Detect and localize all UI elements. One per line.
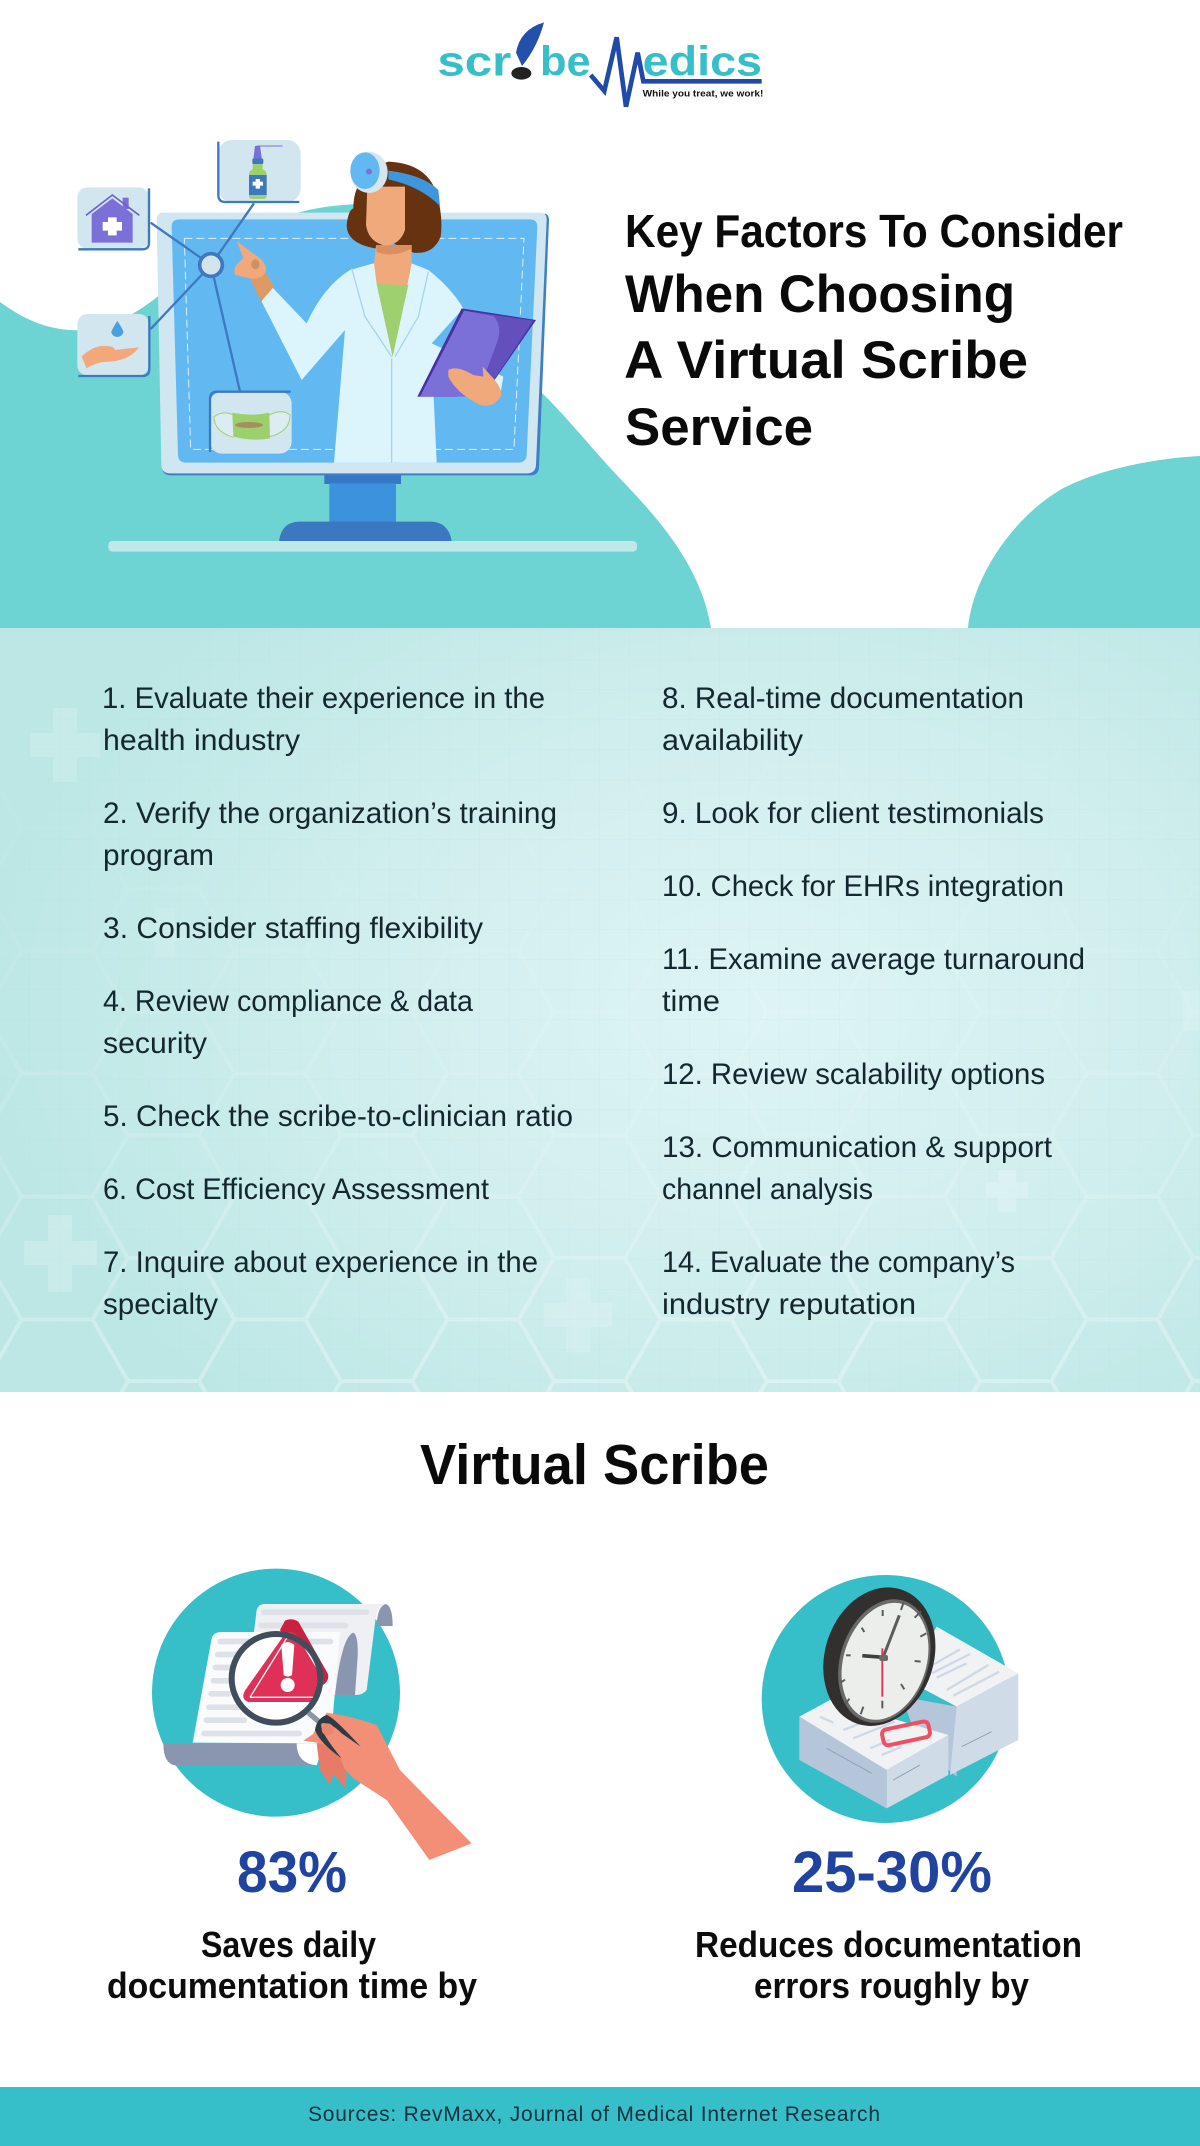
item 12: 12. Review scalability options bbox=[662, 1058, 1045, 1091]
item 3: 3. Consider staffing flexibility bbox=[103, 912, 483, 945]
logo wordmark: scr bbox=[437, 38, 511, 85]
icon: house with cross bbox=[77, 187, 149, 249]
caption: saves documentation time bbox=[107, 1924, 477, 2006]
item 6: 6. Cost Efficiency Assessment bbox=[103, 1173, 490, 1206]
stat: 25-30%: 25-30% bbox=[792, 1840, 992, 1905]
logo wordmark: edics bbox=[643, 38, 762, 85]
item 4 bbox=[103, 985, 473, 1060]
item 8 bbox=[662, 682, 1024, 757]
heading: Virtual Scribe: Virtual Scribe bbox=[420, 1433, 769, 1497]
doctor headband and head mirror bbox=[350, 152, 440, 206]
logo pulse line bbox=[591, 37, 762, 107]
item 11 bbox=[662, 943, 1085, 1018]
item 13 bbox=[662, 1131, 1053, 1206]
logo wordmark: be bbox=[540, 38, 591, 85]
doctor hair bbox=[347, 162, 441, 253]
title bbox=[624, 205, 1123, 457]
title: A Virtual Scribe bbox=[624, 331, 1028, 390]
item 11: 11. Examine average turnaround bbox=[662, 943, 1085, 976]
item 9: 9. Look for client testimonials bbox=[662, 797, 1044, 830]
doctor lab coat bbox=[262, 263, 503, 463]
item 7: 7. Inquire about experience in the bbox=[103, 1246, 538, 1279]
title: Service bbox=[625, 398, 813, 457]
item 8: 8. Real-time documentation bbox=[662, 682, 1024, 715]
item 7: specialty bbox=[103, 1288, 218, 1321]
figure: doctor bbox=[234, 152, 536, 463]
item 13: channel analysis bbox=[662, 1173, 873, 1206]
left list column bbox=[102, 682, 573, 1321]
caption: reduces documentation errors: Reduces documentation bbox=[695, 1924, 1082, 1965]
item 14: industry reputation bbox=[662, 1288, 916, 1321]
logo wordmark bbox=[437, 38, 762, 85]
caption: saves documentation time: documentation time by bbox=[107, 1965, 477, 2006]
stat: 83%: 83% bbox=[237, 1840, 347, 1905]
item 1 bbox=[102, 682, 545, 757]
title: When Choosing bbox=[625, 265, 1015, 324]
item 1: health industry bbox=[103, 724, 300, 757]
doctor hand on clipboard bbox=[448, 367, 501, 406]
icon: hand with water drop bbox=[77, 314, 149, 376]
item 11: time bbox=[662, 985, 720, 1018]
connector lines bbox=[151, 203, 254, 392]
item 14 bbox=[662, 1246, 1015, 1321]
item 7 bbox=[103, 1246, 538, 1321]
right list column bbox=[662, 682, 1085, 1321]
item 2 bbox=[103, 797, 557, 872]
monitor stand bbox=[279, 473, 452, 541]
logo tagline: While you treat, we work! bbox=[643, 88, 763, 98]
caption: reduces documentation errors: errors roughly by bbox=[754, 1965, 1029, 2006]
panel: key factors list bbox=[0, 628, 1200, 1392]
item 14: 14. Evaluate the company’s bbox=[662, 1246, 1015, 1279]
icon: document with warning under magnifier bbox=[152, 1569, 472, 1860]
item 8: availability bbox=[662, 724, 803, 757]
item 1: 1. Evaluate their experience in the bbox=[102, 682, 545, 715]
background blob: right teal hill bbox=[968, 456, 1200, 628]
illustration: doctor on monitor bbox=[77, 140, 637, 552]
icon: face mask bbox=[210, 392, 292, 454]
connector node bbox=[200, 254, 222, 276]
item 10: 10. Check for EHRs integration bbox=[662, 870, 1064, 903]
caption: saves documentation time: Saves daily bbox=[201, 1924, 376, 1965]
desk shelf bbox=[108, 541, 637, 552]
item 2: 2. Verify the organization’s training bbox=[103, 797, 557, 830]
monitor bbox=[157, 213, 549, 475]
clipboard bbox=[417, 308, 536, 397]
footer sources text: Sources: RevMaxx, Journal of Medical Internet Research bbox=[308, 2103, 880, 2126]
caption: reduces documentation errors bbox=[695, 1924, 1082, 2006]
background blob: left teal hill bbox=[0, 204, 711, 628]
doctor neck and shirt bbox=[352, 245, 428, 463]
icon: spray bottle bbox=[218, 140, 301, 202]
title: Key Factors To Consider bbox=[625, 205, 1123, 257]
item 5: 5. Check the scribe-to-clinician ratio bbox=[103, 1100, 573, 1133]
doctor face bbox=[366, 187, 405, 246]
doctor pointing hand bbox=[234, 241, 274, 302]
item 2: program bbox=[103, 839, 214, 872]
logo feather and ink pot bbox=[511, 22, 544, 80]
item 13: 13. Communication & support bbox=[662, 1131, 1053, 1164]
item 4: 4. Review compliance & data bbox=[103, 985, 473, 1018]
item 4: security bbox=[103, 1027, 207, 1060]
logo bbox=[437, 22, 763, 107]
icon: clock on paper stacks bbox=[762, 1573, 1018, 1823]
footer bar bbox=[0, 2087, 1200, 2146]
